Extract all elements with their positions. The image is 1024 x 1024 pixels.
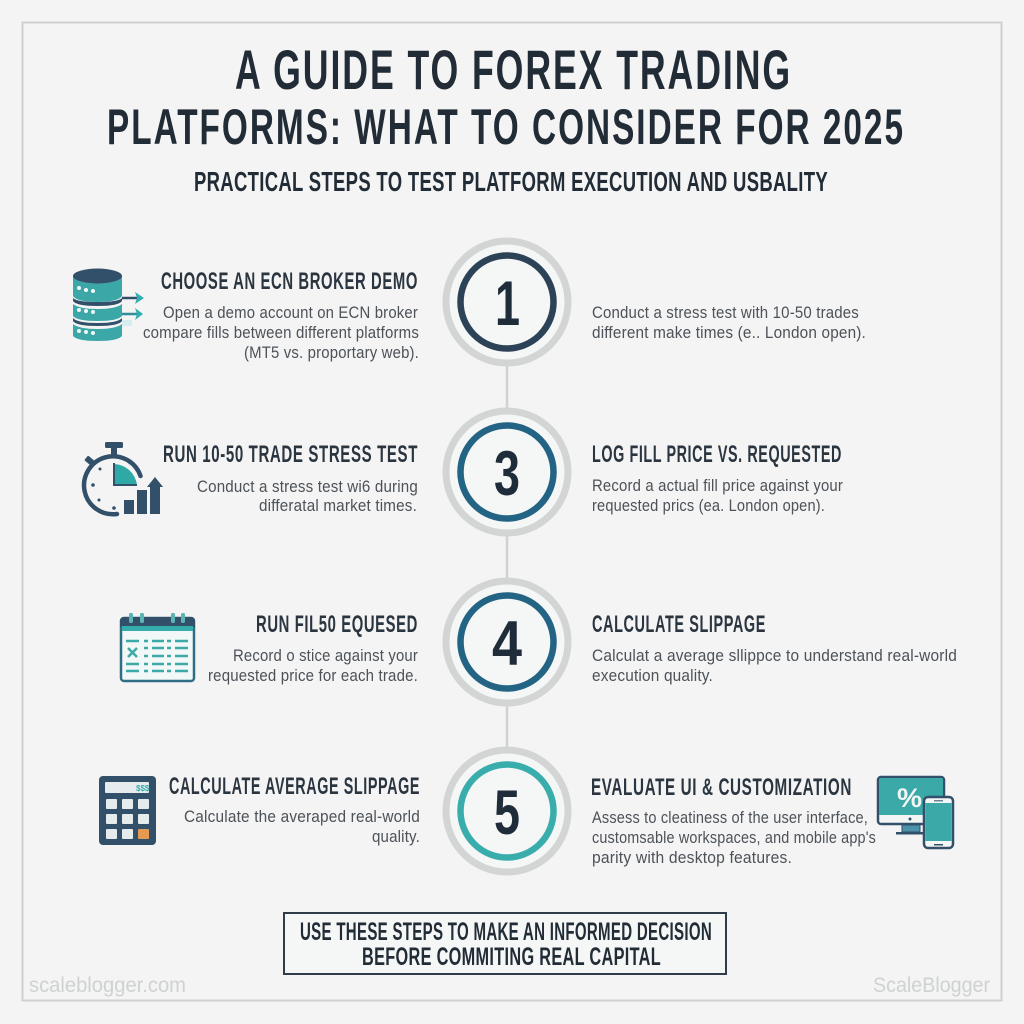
- heading: evaluate UI and customization: EVALUATE UI & CUSTOMIZATION: [591, 774, 852, 801]
- heading: log fill price vs. requested: LOG FILL PRICE VS. REQUESTED: [592, 441, 842, 468]
- body text: Conduct a stress test wi6 during: [197, 477, 418, 496]
- heading: calculate average slippage: CALCULATE AVERAGE SLIPPAGE: [169, 773, 420, 800]
- body text: differatal market times.: [259, 496, 417, 515]
- panel: left step 1: [143, 268, 419, 362]
- icon: calculator: [99, 776, 156, 845]
- timeline connectors: [506, 366, 508, 747]
- body text: quality.: [372, 827, 420, 846]
- body text: [592, 808, 876, 867]
- body text: [208, 646, 418, 685]
- number badge 3: 3: [494, 439, 520, 509]
- body text: Calculate the averaped real-world: [184, 807, 420, 826]
- number badge 5: 5: [494, 778, 520, 848]
- callout: USE THESE STEPS TO MAKE AN INFORMED DECISION: [300, 918, 712, 946]
- body text: execution quality.: [592, 666, 713, 685]
- callout: BEFORE COMMITING REAL CAPITAL: [362, 943, 661, 971]
- body text: (MT5 vs. proportary web).: [244, 343, 419, 362]
- heading: calculate slippage: CALCULATE SLIPPAGE: [592, 611, 766, 638]
- panel: right step 1: Conduct a stress test with 10-50 trades: [592, 303, 859, 322]
- number badge 5: [446, 750, 568, 872]
- icon: stopwatch with bars: [84, 442, 163, 514]
- watermark right: ScaleBlogger: [873, 974, 990, 997]
- number badge 1: [446, 241, 568, 363]
- body text: [197, 477, 418, 515]
- number badge 1: 1: [495, 269, 520, 339]
- body text: [143, 303, 419, 362]
- panel: right step 5: [591, 774, 876, 867]
- body text: [184, 807, 420, 846]
- watermark left: scaleblogger.com: [29, 974, 186, 997]
- panel: right step 1: different make times (e.. London open).: [592, 323, 866, 342]
- icon: calculator: $$$: [136, 784, 150, 793]
- icon: database with arrows: [73, 268, 144, 341]
- body text: requested prics (ea. London open).: [592, 496, 825, 515]
- callout: [284, 913, 726, 974]
- number badge 4: 4: [492, 609, 522, 679]
- heading: run fil50 equesed: RUN FIL50 EQUESED: [256, 611, 418, 638]
- panel: right step 1: [592, 303, 866, 342]
- number badge 3: [446, 411, 568, 533]
- panel: right step 3: [592, 441, 843, 515]
- panel: right step 4: [592, 611, 957, 685]
- icon: calendar spreadsheet: [120, 613, 195, 681]
- title: [107, 38, 905, 155]
- body text: Record o stice against your: [233, 646, 418, 665]
- body text: [592, 476, 843, 515]
- panel: left step 3: [163, 441, 418, 515]
- body text: customsable workspaces, and mobile app's: [592, 828, 876, 847]
- heading: choose an ECN broker demo: CHOOSE AN ECN BROKER DEMO: [161, 268, 418, 295]
- body text: Record a actual fill price against your: [592, 476, 843, 495]
- body text: parity with desktop features.: [592, 848, 792, 867]
- body text: Calculat a average sllippce to understand real-world: [592, 646, 957, 665]
- body text: requested price for each trade.: [208, 666, 418, 685]
- body text: [592, 646, 957, 685]
- icon: monitor and phone: %: [897, 783, 922, 813]
- heading: run 10-50 trade stress test: RUN 10-50 TRADE STRESS TEST: [163, 441, 418, 468]
- icon: monitor and phone: [878, 777, 953, 848]
- number badge 4: [446, 581, 568, 703]
- panel: left step 5: [169, 773, 420, 846]
- body text: Open a demo account on ECN broker: [163, 303, 418, 322]
- body text: compare fills between different platforms: [143, 323, 419, 342]
- panel: left step 4: [208, 611, 418, 685]
- body text: Assess to cleatiness of the user interface,: [592, 808, 868, 827]
